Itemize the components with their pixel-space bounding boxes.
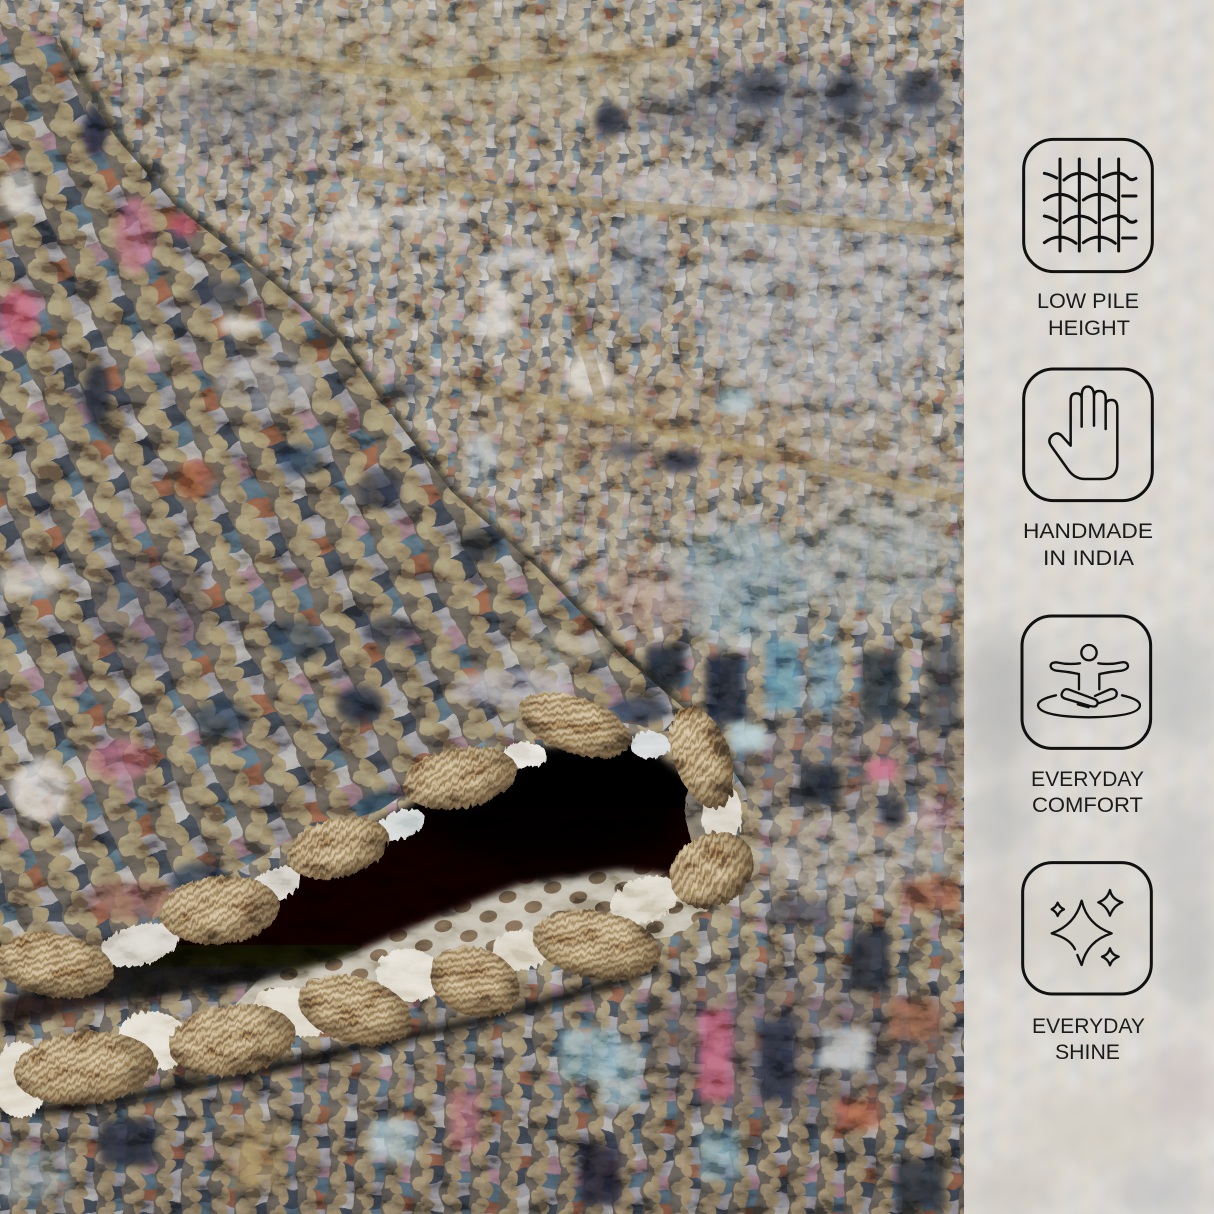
- feature: low pile height: [1024, 139, 1152, 340]
- translucent right panel: [944, 0, 1214, 1214]
- label: IN INDIA: [1043, 546, 1135, 570]
- label: [1023, 519, 1153, 570]
- label: HANDMADE: [1023, 519, 1153, 543]
- label: COMFORT: [1032, 793, 1143, 817]
- cream rug back: [610, 790, 706, 925]
- lower rug colour tone: [0, 505, 980, 1210]
- tonal mottling over the photo: [0, 0, 964, 1214]
- label: SHINE: [1055, 1040, 1120, 1064]
- icon: woven pile: [1024, 139, 1152, 272]
- rolled rug fold: [0, 0, 810, 1030]
- icon: sparkles: [1023, 863, 1151, 994]
- feature: everyday shine: [1023, 863, 1151, 1064]
- icon: seated meditation: [1022, 616, 1151, 748]
- label: EVERYDAY: [1031, 767, 1144, 791]
- label: EVERYDAY: [1032, 1014, 1145, 1038]
- bottom twisted rope border: [0, 900, 666, 1118]
- label: [1037, 289, 1139, 340]
- feature: handmade in india: [1023, 369, 1153, 570]
- roll edge rope blobs: [0, 679, 768, 1007]
- shadow of the fold on the flat rug: [60, 40, 746, 790]
- dark hollow under the fold: [0, 740, 705, 1030]
- label: [1032, 1014, 1145, 1064]
- label: HEIGHT: [1048, 316, 1130, 340]
- label: LOW PILE: [1037, 289, 1139, 313]
- interior cream underside: [236, 831, 713, 1006]
- icon: open hand: [1024, 369, 1152, 501]
- upper rug colour tone: [100, 15, 970, 550]
- feature: everyday comfort: [1022, 616, 1151, 817]
- label: [1031, 767, 1144, 817]
- rolled rug outer surface: [0, 22, 751, 950]
